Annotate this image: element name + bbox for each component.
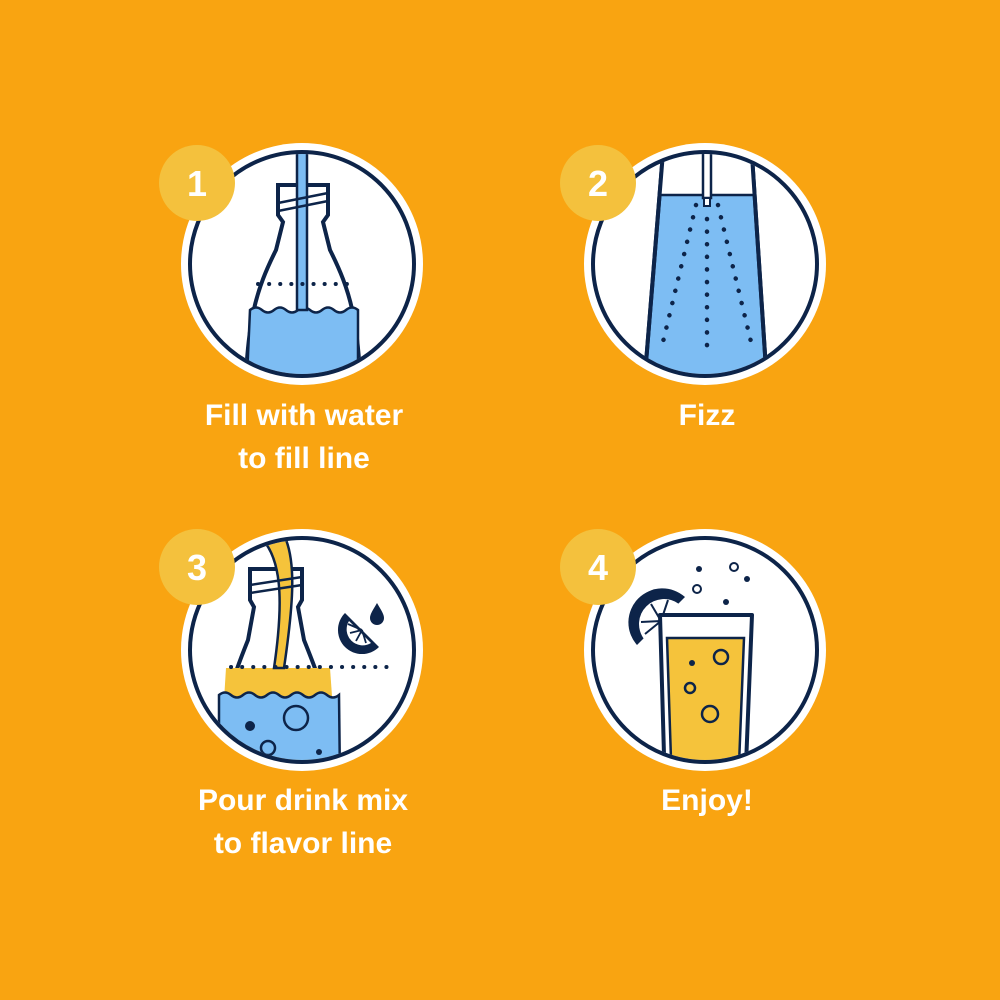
- badge: 3: 3: [187, 547, 207, 588]
- label: step 2: Fizz: [679, 399, 735, 432]
- panel: step 1 icon: [181, 140, 423, 400]
- badge: 2: [560, 145, 636, 221]
- badge: 4: [560, 529, 636, 605]
- badge: 1: 1: [187, 163, 207, 204]
- label: step 4: Enjoy!: [661, 784, 753, 817]
- panel: step 4 icon: [584, 529, 826, 790]
- icon: bubbles: [693, 563, 750, 605]
- label: step 1: [205, 399, 403, 475]
- badge: 4: 4: [588, 547, 608, 588]
- badge: 1: [159, 145, 235, 221]
- label: step 3: [198, 784, 408, 860]
- label: step 1: Fill with water: [205, 399, 403, 432]
- icon: lemon and drop: [338, 603, 384, 654]
- label: step 1: to fill line: [238, 442, 370, 475]
- label: step 3: to flavor line: [214, 827, 392, 860]
- icon: lemon wedge: [628, 588, 685, 645]
- badge: 3: [159, 529, 235, 605]
- badge: 2: 2: [588, 163, 608, 204]
- panel: step 3 icon: [181, 529, 423, 780]
- panel: step 2 icon: [584, 140, 826, 400]
- label: step 3: Pour drink mix: [198, 784, 408, 817]
